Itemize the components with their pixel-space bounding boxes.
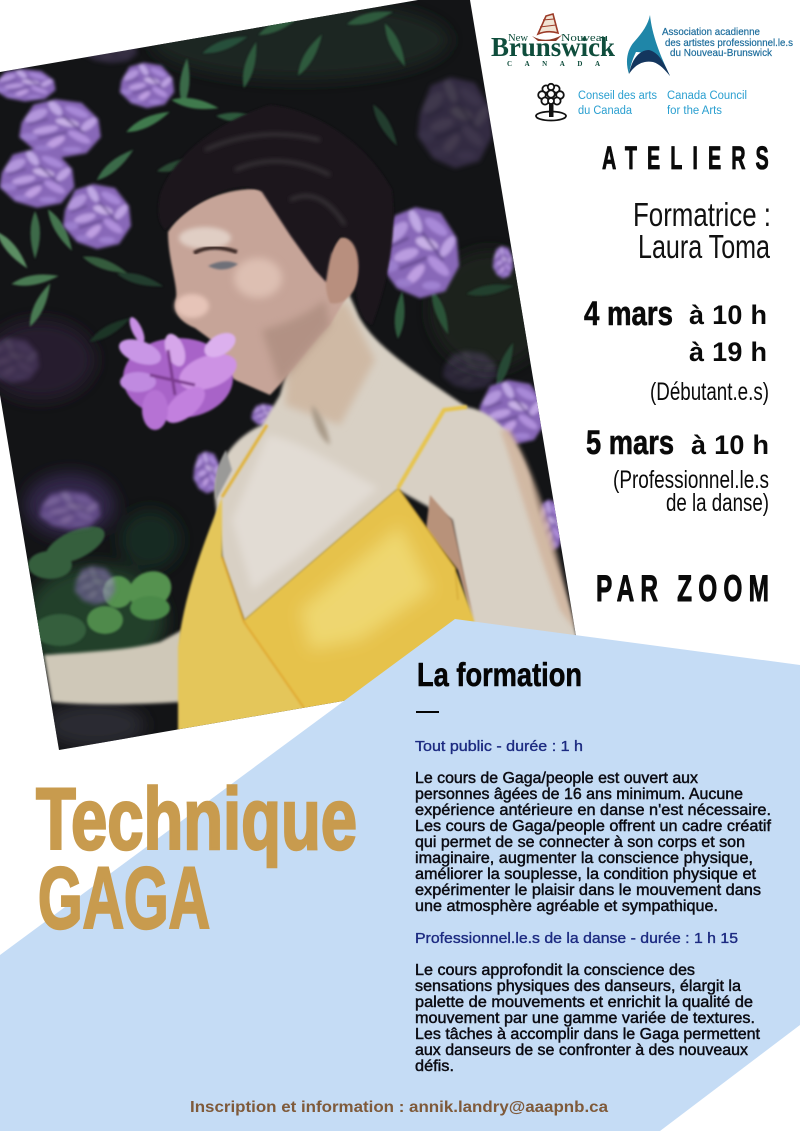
logo: Association acadienne (627, 15, 793, 76)
logo: New Brunswick: Brunswick (491, 32, 615, 62)
logo: New Brunswick (491, 14, 615, 68)
instructor (633, 196, 771, 265)
text block: professionnels: aux danseurs de se confronter à des nouveaux (415, 1042, 748, 1059)
photo background foliage (0, 0, 600, 760)
subhead: professionnels: Professionnel.le.s de la danse - durée : 1 h 15 (415, 930, 738, 947)
text block: professionnels: mouvement par une gamme variée de textures. (415, 1010, 755, 1027)
lilac flower clusters (0, 63, 564, 551)
dim background flowers (0, 37, 497, 605)
heading: ateliers: ATELIERS (602, 140, 769, 176)
text block: tout public: Le cours de Gaga/people est ouvert aux (415, 770, 698, 787)
session: 4 mars: 4 mars (584, 295, 673, 333)
photo: dancer with flower (0, 0, 600, 760)
text block: tout public: imaginaire, augmenter la conscience physique, (415, 850, 753, 867)
ear (326, 237, 361, 304)
text block: tout public (415, 770, 772, 915)
icon: tree (536, 84, 566, 120)
session: 5 mars (586, 424, 769, 517)
logo: Association acadienne: des artistes professionnel.le.s (665, 37, 793, 49)
logo: Canada Council for the Arts: Conseil des arts (578, 90, 657, 102)
text block: tout public: améliorer la souplesse, la condition physique et (415, 866, 757, 883)
text block: tout public: qui permet de se connecter à son corps et son (415, 834, 745, 851)
session: 5 mars: 5 mars (586, 424, 674, 462)
text block: professionnels: palette de mouvements et enrichit la qualité de (415, 994, 753, 1011)
session: 5 mars: de la danse) (666, 489, 769, 517)
flower at mouth (116, 315, 242, 430)
hair (158, 105, 394, 325)
logo: Association acadienne: Association acadienne (662, 26, 760, 38)
yellow dress (178, 407, 480, 745)
torso, neck and right arm skin (215, 285, 578, 640)
par zoom: PAR ZOOM (596, 568, 769, 609)
text block: professionnels: défis. (415, 1058, 454, 1075)
logo: New Brunswick: CANADA (507, 60, 600, 68)
text block: tout public: expérience antérieure en danse n'est nécessaire. (415, 802, 771, 819)
title: Technique GAGA: GAGA (38, 850, 210, 947)
text block: professionnels: Les tâches à accomplir dans le Gaga permettent (415, 1026, 761, 1043)
title: Technique GAGA: Technique (36, 771, 357, 868)
logo: Canada Council for the Arts (536, 84, 747, 120)
left arm (44, 630, 182, 704)
session: 4 mars (584, 295, 769, 406)
logo: Canada Council for the Arts: for the Arts (667, 105, 722, 117)
text block: professionnels: sensations physiques des danseurs, élargit la (415, 978, 741, 995)
logo: Canada Council for the Arts: du Canada (578, 105, 633, 117)
subhead: tout public: Tout public - durée : 1 h (415, 738, 583, 755)
heading: la formation: La formation (417, 656, 582, 693)
session: 5 mars: à 10 h (691, 430, 769, 460)
text block: tout public: une atmosphère agréable et sympathique. (415, 898, 718, 915)
logo: New Brunswick: Nouveau (561, 33, 608, 44)
text block: tout public: Les cours de Gaga/people offrent un cadre créatif (415, 818, 772, 835)
logo: Association acadienne: du Nouveau-Brunswick (670, 47, 773, 59)
face (168, 189, 345, 395)
blue panel (0, 619, 800, 1131)
divider rule (416, 711, 439, 713)
session: 4 mars: à 10 h (689, 300, 767, 330)
session: 4 mars: à 19 h (689, 337, 767, 367)
text block: professionnels: Le cours approfondit la conscience des (415, 962, 695, 979)
text block: professionnels (415, 962, 761, 1075)
footer: contact: Inscription et information : annik.landry@aaapnb.ca (190, 1099, 608, 1116)
text block: tout public: expérimenter le plaisir dans le mouvement dans (415, 882, 761, 899)
text block: tout public: personnes âgées de 16 ans minimum. Aucune (415, 786, 743, 803)
logo: New Brunswick: New (508, 33, 529, 44)
logo: Canada Council for the Arts: Canada Council (667, 90, 747, 102)
title: Technique GAGA (36, 771, 357, 947)
icon: peak arrow (627, 15, 670, 76)
